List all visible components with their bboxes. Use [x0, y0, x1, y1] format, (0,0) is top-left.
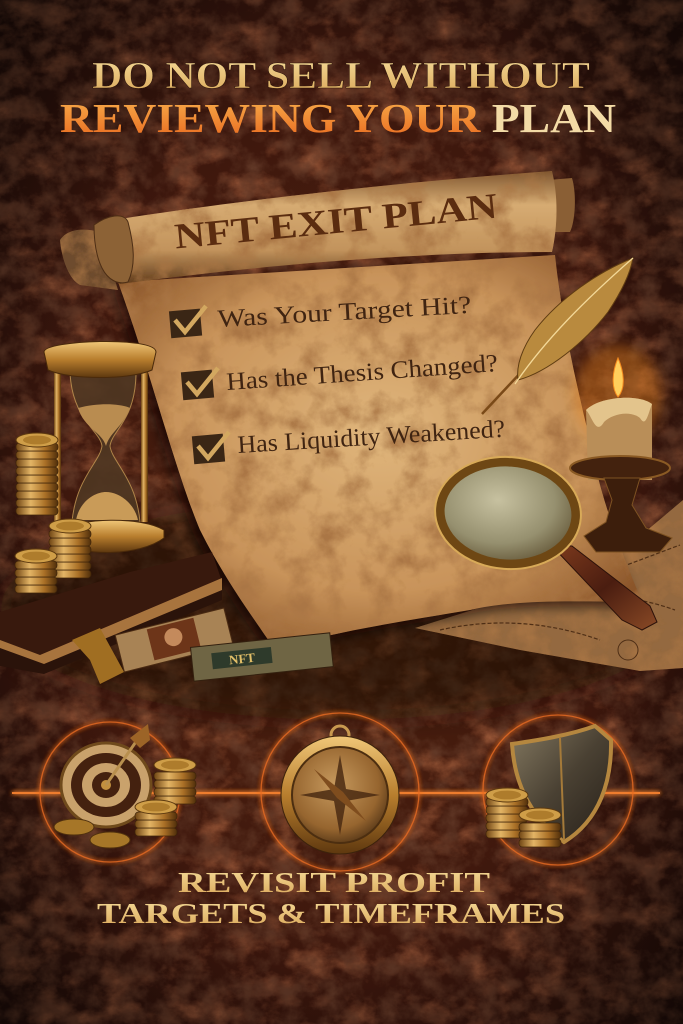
checklist item 1: Was Your Target Hit?	[217, 292, 472, 333]
icon: shield with coins	[486, 726, 611, 847]
parchment shadow	[112, 260, 636, 655]
icon: target with arrow and coins	[54, 724, 196, 848]
checklist item 3: Has Liquidity Weakened?	[237, 416, 506, 459]
title: REVIEWING YOUR PLAN	[60, 95, 616, 141]
title: DO NOT SELL WITHOUT	[92, 55, 590, 97]
parchment sheet	[118, 255, 642, 650]
icon: magnifying glass	[431, 452, 657, 630]
connector line	[12, 713, 660, 871]
icon: compass	[281, 726, 399, 854]
icon: coin stacks	[16, 433, 91, 578]
checklist item 1	[169, 292, 472, 338]
icon: candle	[570, 345, 672, 552]
panel: parchment scroll	[60, 171, 642, 655]
caption	[97, 867, 565, 930]
icon: quill feather	[482, 258, 633, 414]
icon: book	[0, 552, 222, 684]
map under parchment	[415, 500, 683, 671]
title	[60, 55, 616, 141]
checklist item 2: Has the Thesis Changed?	[226, 350, 499, 396]
coin stack on book	[15, 549, 57, 593]
caption: REVISIT PROFIT	[178, 867, 490, 899]
scroll heading: NFT EXIT PLAN	[173, 186, 499, 256]
icon: hourglass	[44, 341, 164, 553]
rolled top	[60, 171, 575, 290]
icon: NFT cards: NFT	[228, 650, 256, 667]
icon: NFT cards	[115, 608, 333, 681]
caption: TARGETS & TIMEFRAMES	[97, 898, 565, 930]
